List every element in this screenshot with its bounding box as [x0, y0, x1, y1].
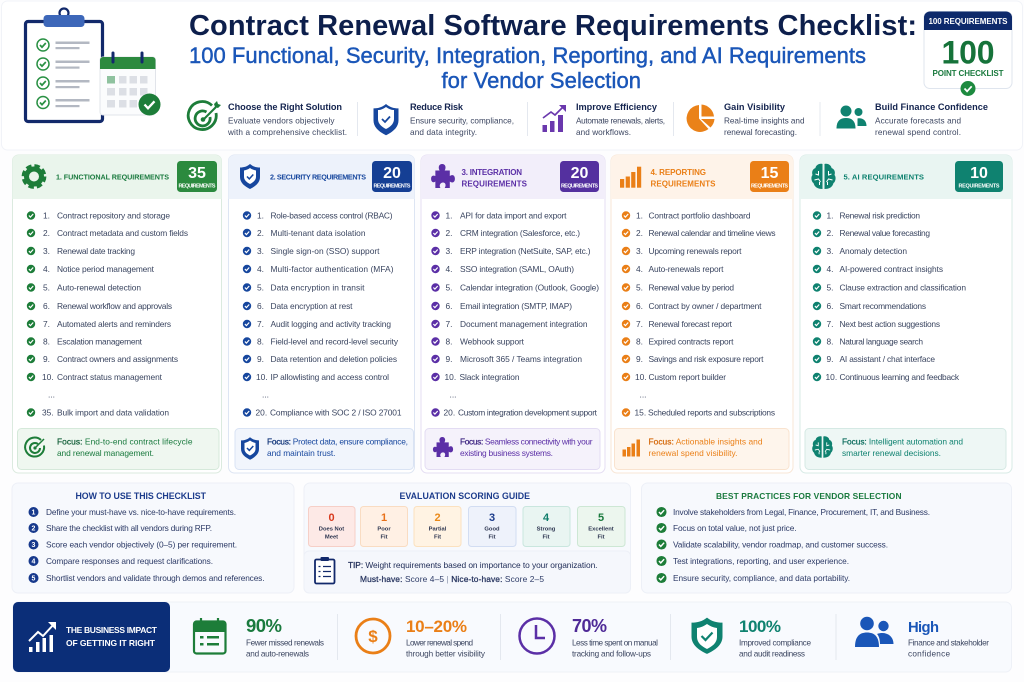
benefit: build finance confidence [836, 102, 988, 137]
item: Renewal date tracking [57, 246, 135, 256]
step 4: 4 [32, 558, 36, 566]
item: 5. [636, 282, 643, 292]
item: 4. [257, 264, 264, 274]
score 1: Poor [377, 526, 391, 532]
stat: 10–20%: 10–20% [406, 617, 467, 636]
ellipsis: ... [48, 390, 55, 400]
item: Compliance with SOC 2 / ISO 27001 [270, 408, 402, 418]
item: Focus on total value, not just price. [673, 523, 796, 533]
item: Renewal calendar and timeline views [648, 228, 776, 238]
item: Custom report builder [648, 372, 726, 382]
panel header: REQUIREMENTS [958, 184, 1000, 190]
item: 4. [636, 264, 643, 274]
item: 5. [446, 282, 452, 292]
score 2 [414, 506, 461, 546]
icon: clipboard checklist and calendar [26, 8, 160, 122]
stat: 10–20%: $ [368, 627, 378, 646]
item: 2. [826, 228, 834, 238]
item: Contract portfolio dashboard [648, 210, 751, 220]
benefit: reduce risk: Ensure security, compliance, [410, 116, 514, 126]
item: Automated alerts and reminders [57, 319, 171, 329]
focus box [235, 428, 414, 470]
item: 6. [43, 301, 50, 311]
panel header: 10 [970, 165, 988, 182]
item: CRM integration (Salesforce, etc.) [460, 228, 580, 238]
callout: the business impact: OF GETTING IT RIGHT [66, 638, 156, 648]
badge: 100 point checklist: 100 [942, 34, 994, 70]
item: 3. [43, 246, 50, 256]
score 2: 2 [434, 512, 441, 524]
stat: 100%: and audit readiness [739, 650, 805, 658]
callout: the business impact [13, 602, 170, 672]
item: Renewal value forecasting [840, 228, 930, 238]
item: 1. [43, 210, 50, 220]
score 1 [360, 506, 408, 546]
item: 9. [636, 354, 643, 364]
numbered steps [28, 507, 264, 583]
benefit: choose the right solution [188, 101, 347, 137]
stat: 100% [692, 617, 811, 658]
score 4 [523, 506, 570, 546]
step 3: 3 [32, 542, 36, 549]
item: Bulk import and data validation [57, 408, 169, 418]
panel: how to use this checklist [12, 483, 294, 593]
item: 1. [826, 210, 834, 220]
score 5 [578, 506, 625, 546]
item: 4. [43, 264, 50, 274]
panel header: REQUIREMENTS [178, 184, 216, 190]
item: Multi-factor authentication (MFA) [270, 264, 394, 274]
item: Renewal workflow and approvals [57, 301, 172, 311]
panel: ai requirements [800, 155, 1012, 473]
item: 6. [636, 301, 643, 311]
item: AI assistant / chat interface [840, 354, 935, 364]
stat: 10–20% [356, 617, 486, 658]
item: 8. [826, 336, 834, 346]
panel header: 2. SECURITY REQUIREMENTS [270, 173, 366, 182]
item: 8. [446, 336, 452, 346]
item: 10. [256, 372, 268, 382]
item: Escalation management [57, 336, 143, 346]
benefit: choose the right solution: Choose the Right Solution [228, 102, 342, 112]
item: 9. [257, 354, 264, 364]
heading: HOW TO USE THIS CHECKLIST [76, 491, 207, 501]
item: Involve stakeholders from Legal, Finance, Procurement, IT, and Business. [673, 507, 930, 517]
focus box: renewal spend visibility. [648, 448, 738, 458]
tip box: Must-have: Score 4–5 | Nice-to-have: Score 2–5 [360, 574, 544, 584]
item: 2. [257, 228, 264, 238]
title: Contract Renewal Software Requirements Checklist: [189, 10, 917, 42]
focus box: and renewal management. [57, 448, 154, 458]
focus box [18, 428, 219, 470]
benefit: choose the right solution: Evaluate vendors objectively [228, 116, 335, 126]
benefit: reduce risk: and data integrity. [410, 128, 477, 137]
item: API for data import and export [460, 210, 567, 220]
item: 3. [446, 246, 452, 256]
panel: best practices for vendor selection [642, 483, 1012, 593]
focus box: Focus: Seamless connectivity with your [460, 436, 593, 446]
item: 10. [42, 372, 54, 382]
item: Continuous learning and feedback [840, 372, 960, 382]
stat: 90%: Fewer missed renewals [246, 638, 324, 648]
checklist [622, 210, 776, 418]
score 5: Excellent [588, 526, 614, 532]
item: Auto-renewal detection [57, 282, 141, 292]
item: Scheduled reports and subscriptions [648, 408, 775, 418]
item: Auto-renewals report [648, 264, 724, 274]
item [431, 336, 525, 346]
item: Renewal risk prediction [840, 210, 920, 220]
step 1: Define your must-have vs. nice-to-have requirements. [46, 507, 236, 517]
stat: 70%: tracking and follow-ups [572, 650, 651, 658]
benefit: improve efficiency: Improve Efficiency [576, 102, 658, 112]
score 1: 1 [381, 512, 387, 524]
badge: 100 point checklist: 100 REQUIREMENTS [928, 17, 1008, 26]
item: Validate scalability, vendor roadmap, and customer success. [673, 540, 888, 550]
item: Multi-tenant data isolation [270, 228, 366, 238]
focus box: Focus: Intelligent automation and [842, 436, 963, 446]
item: Role-based access control (RBAC) [270, 210, 393, 220]
stat: 10–20%: through better visibility [406, 650, 486, 658]
panel header [611, 155, 793, 199]
band: business impact [13, 602, 1012, 672]
item: 8. [636, 336, 643, 346]
benefit: gain visibility [687, 102, 805, 137]
item: Data encryption at rest [270, 301, 353, 311]
item: 6. [446, 301, 452, 311]
item: ERP integration (NetSuite, SAP, etc.) [460, 246, 591, 256]
panel: security requirements [228, 155, 414, 473]
checklist [813, 210, 966, 382]
item: 5. [826, 282, 834, 292]
stat: high: Finance and stakeholder [908, 638, 989, 648]
item: 7. [257, 319, 264, 329]
panel header [421, 155, 605, 199]
stat: 70% [520, 616, 658, 658]
tip box: TIP: Weight requirements based on importance to your organization. [348, 560, 598, 570]
panel header: 4. REPORTING [650, 168, 706, 177]
step 2: Share the checklist with all vendors during RFP. [46, 523, 212, 533]
item: 8. [43, 336, 50, 346]
panel header [12, 155, 222, 199]
item: Email integration (SMTP, IMAP) [460, 301, 572, 311]
heading: EVALUATION SCORING GUIDE [400, 491, 530, 501]
panel: integration requirements [421, 155, 605, 473]
item: Renewal forecast report [648, 319, 733, 329]
item: Notice period management [57, 264, 155, 274]
stat: 90%: and auto-renewals [246, 650, 309, 658]
panel header: REQUIREMENTS [462, 179, 528, 188]
item: 1. [257, 210, 264, 220]
item: Anomaly detection [840, 246, 907, 256]
item: 10. [635, 372, 647, 382]
checklist [243, 210, 402, 418]
item [431, 372, 520, 382]
callout: the business impact: THE BUSINESS IMPACT [66, 625, 158, 635]
focus box [425, 428, 600, 470]
item: Webhook support [460, 336, 525, 346]
item: 7. [446, 319, 452, 329]
subtitle: for Vendor Selection [442, 68, 641, 93]
item: 20. [256, 408, 267, 418]
item: Document management integration [460, 319, 588, 329]
item: Audit logging and activity tracking [270, 319, 391, 329]
score 0: Meet [325, 534, 338, 540]
panel header: 20 [383, 165, 401, 182]
item: 8. [257, 336, 264, 346]
score 5: 5 [598, 512, 604, 524]
step 3: Score each vendor objectively (0–5) per requirement. [46, 540, 237, 550]
item: 4. [826, 264, 834, 274]
panel header [800, 155, 1012, 199]
item: 4. [446, 264, 452, 274]
benefit: improve efficiency: Automate renewals, alerts, [576, 116, 665, 126]
item: Calendar integration (Outlook, Google) [460, 282, 599, 292]
item: 3. [826, 246, 834, 256]
panel: reporting requirements [611, 155, 793, 473]
panel header: 3. INTEGRATION [462, 168, 522, 177]
benefit: gain visibility: Gain Visibility [724, 102, 786, 112]
badge: 100 point checklist [924, 12, 1012, 96]
item: 7. [826, 319, 834, 329]
heading: BEST PRACTICES FOR VENDOR SELECTION [716, 491, 902, 501]
score 3 [468, 506, 516, 546]
item: 9. [826, 354, 834, 364]
item: Renewal value by period [648, 282, 734, 292]
panel header: 35 [188, 165, 206, 182]
panel header: 5. AI REQUIREMENTS [844, 173, 924, 182]
item: Ensure security, compliance, and data portability. [673, 573, 850, 583]
item: 15. [634, 408, 646, 418]
item: 3. [636, 246, 643, 256]
panel header: REQUIREMENTS [751, 184, 788, 190]
step 4: Compare responses and request clarifications. [46, 556, 213, 566]
stat: high: confidence [908, 650, 950, 658]
panel header: REQUIREMENTS [650, 179, 716, 188]
score 0: 0 [328, 512, 335, 524]
item: Custom integration development support [458, 408, 598, 418]
stat: 10–20%: Lower renewal spend [406, 638, 473, 648]
item: Natural language search [840, 336, 923, 346]
panel: evaluation scoring guide [304, 483, 630, 593]
item: Smart recommendations [840, 301, 926, 311]
benefit: gain visibility: Real-time insights and [724, 116, 805, 126]
panel header: REQUIREMENTS [561, 184, 598, 190]
item: AI-powered contract insights [840, 264, 943, 274]
stat: 100%: 100% [739, 617, 781, 636]
stat: high [855, 617, 989, 658]
item: 3. [257, 246, 264, 256]
focus box: Focus: End-to-end contract lifecycle [57, 436, 193, 446]
score 2: Partial [429, 526, 447, 532]
benefit: improve efficiency [542, 102, 665, 137]
item: SSO integration (SAML, OAuth) [460, 264, 574, 274]
score 5: Fit [597, 534, 605, 540]
score 4: Fit [542, 534, 550, 540]
item: 2. [636, 228, 643, 238]
item: 10. [444, 372, 456, 382]
stat: 90% [194, 615, 324, 658]
checklist [431, 210, 599, 418]
score 2: Fit [434, 534, 441, 540]
item: Test integrations, reporting, and user experience. [673, 556, 849, 566]
benefit: choose the right solution: with a comprehensive checklist. [227, 128, 347, 137]
item: Data encryption in transit [270, 282, 365, 292]
item: 1. [636, 210, 643, 220]
panel header: REQUIREMENTS [374, 184, 411, 190]
item: 7. [43, 319, 50, 329]
stat: 70%: 70% [572, 616, 607, 636]
score 3: Fit [488, 534, 496, 540]
item: 2. [43, 228, 50, 238]
item: 5. [257, 282, 264, 292]
item: Contract by owner / department [648, 301, 762, 311]
step 5: Shortlist vendors and validate through demos and references. [46, 573, 264, 583]
panel: functional requirements [12, 155, 222, 473]
focus box: existing business systems. [460, 448, 553, 458]
focus box: smarter renewal decisions. [842, 448, 941, 458]
step 1: 1 [32, 510, 36, 516]
item: 5. [43, 282, 50, 292]
item: IP allowlisting and access control [270, 372, 389, 382]
benefit: improve efficiency: and workflows. [576, 128, 631, 137]
item: Slack integration [460, 372, 520, 382]
item: 20. [444, 408, 455, 418]
item: 7. [636, 319, 643, 329]
item: Upcoming renewals report [648, 246, 742, 256]
header section [2, 1, 1022, 150]
ellipsis: ... [450, 390, 456, 400]
focus box [614, 428, 789, 470]
item: 10. [826, 372, 837, 382]
stat: 70%: Less time spent on manual [572, 638, 658, 648]
item: Single sign-on (SSO) support [270, 246, 380, 256]
item: Field-level and record-level security [270, 336, 399, 346]
stat: high: High [908, 620, 939, 636]
subtitle [189, 43, 866, 93]
item: 35. [42, 408, 54, 418]
item: 1. [446, 210, 452, 220]
checklist [27, 210, 188, 418]
panel header: 20 [571, 165, 588, 182]
stat: 90%: 90% [246, 615, 282, 636]
item: Contract repository and storage [57, 210, 170, 220]
panel header: 15 [761, 165, 778, 182]
item: Contract status management [57, 372, 163, 382]
step 5: 5 [32, 576, 36, 582]
focus box [805, 428, 1006, 470]
item: 6. [826, 301, 834, 311]
item: Contract metadata and custom fields [57, 228, 188, 238]
item: Next best action suggestions [840, 319, 940, 329]
item: 2. [446, 228, 452, 238]
panel header [228, 155, 414, 199]
focus box: Focus: Protect data, ensure compliance, [267, 436, 408, 446]
benefit: reduce risk [374, 102, 514, 137]
ellipsis: ... [640, 390, 646, 400]
badge: 100 point checklist: POINT CHECKLIST [932, 69, 1004, 78]
item: Savings and risk exposure report [648, 354, 764, 364]
score 3: Good [484, 526, 500, 532]
ellipsis: ... [262, 390, 269, 400]
score 0 [308, 506, 355, 546]
focus box: Focus: Actionable insights and [648, 436, 763, 446]
item: Clause extraction and classification [840, 282, 966, 292]
score 3: 3 [489, 512, 495, 524]
focus box: and maintain trust. [267, 448, 336, 458]
item: Data retention and deletion policies [270, 354, 397, 364]
item: Expired contracts report [648, 336, 734, 346]
benefit: build finance confidence: Accurate forecasts and [875, 116, 961, 126]
tip box [304, 551, 630, 593]
subtitle: 100 Functional, Security, Integration, Reporting, and AI Requirements [189, 43, 866, 68]
benefit: gain visibility: renewal forecasting. [724, 128, 797, 137]
item: 9. [43, 354, 50, 364]
checklist [656, 507, 930, 583]
score 4: Strong [537, 526, 556, 532]
benefit: build finance confidence: Build Finance Confidence [875, 102, 988, 112]
item: 9. [446, 354, 452, 364]
item: Contract owners and assignments [57, 354, 178, 364]
score 4: 4 [543, 512, 550, 524]
item: Microsoft 365 / Teams integration [460, 354, 582, 364]
stat: 100%: Improved compliance [739, 638, 811, 648]
score 1: Fit [380, 534, 388, 540]
item: 6. [257, 301, 264, 311]
benefit: reduce risk: Reduce Risk [410, 102, 464, 112]
score 0: Does Not [319, 526, 344, 532]
panel header: 1. FUNCTIONAL REQUIREMENTS [56, 173, 169, 182]
benefit: build finance confidence: renewal spend control. [875, 128, 961, 137]
step 2: 2 [32, 526, 36, 532]
